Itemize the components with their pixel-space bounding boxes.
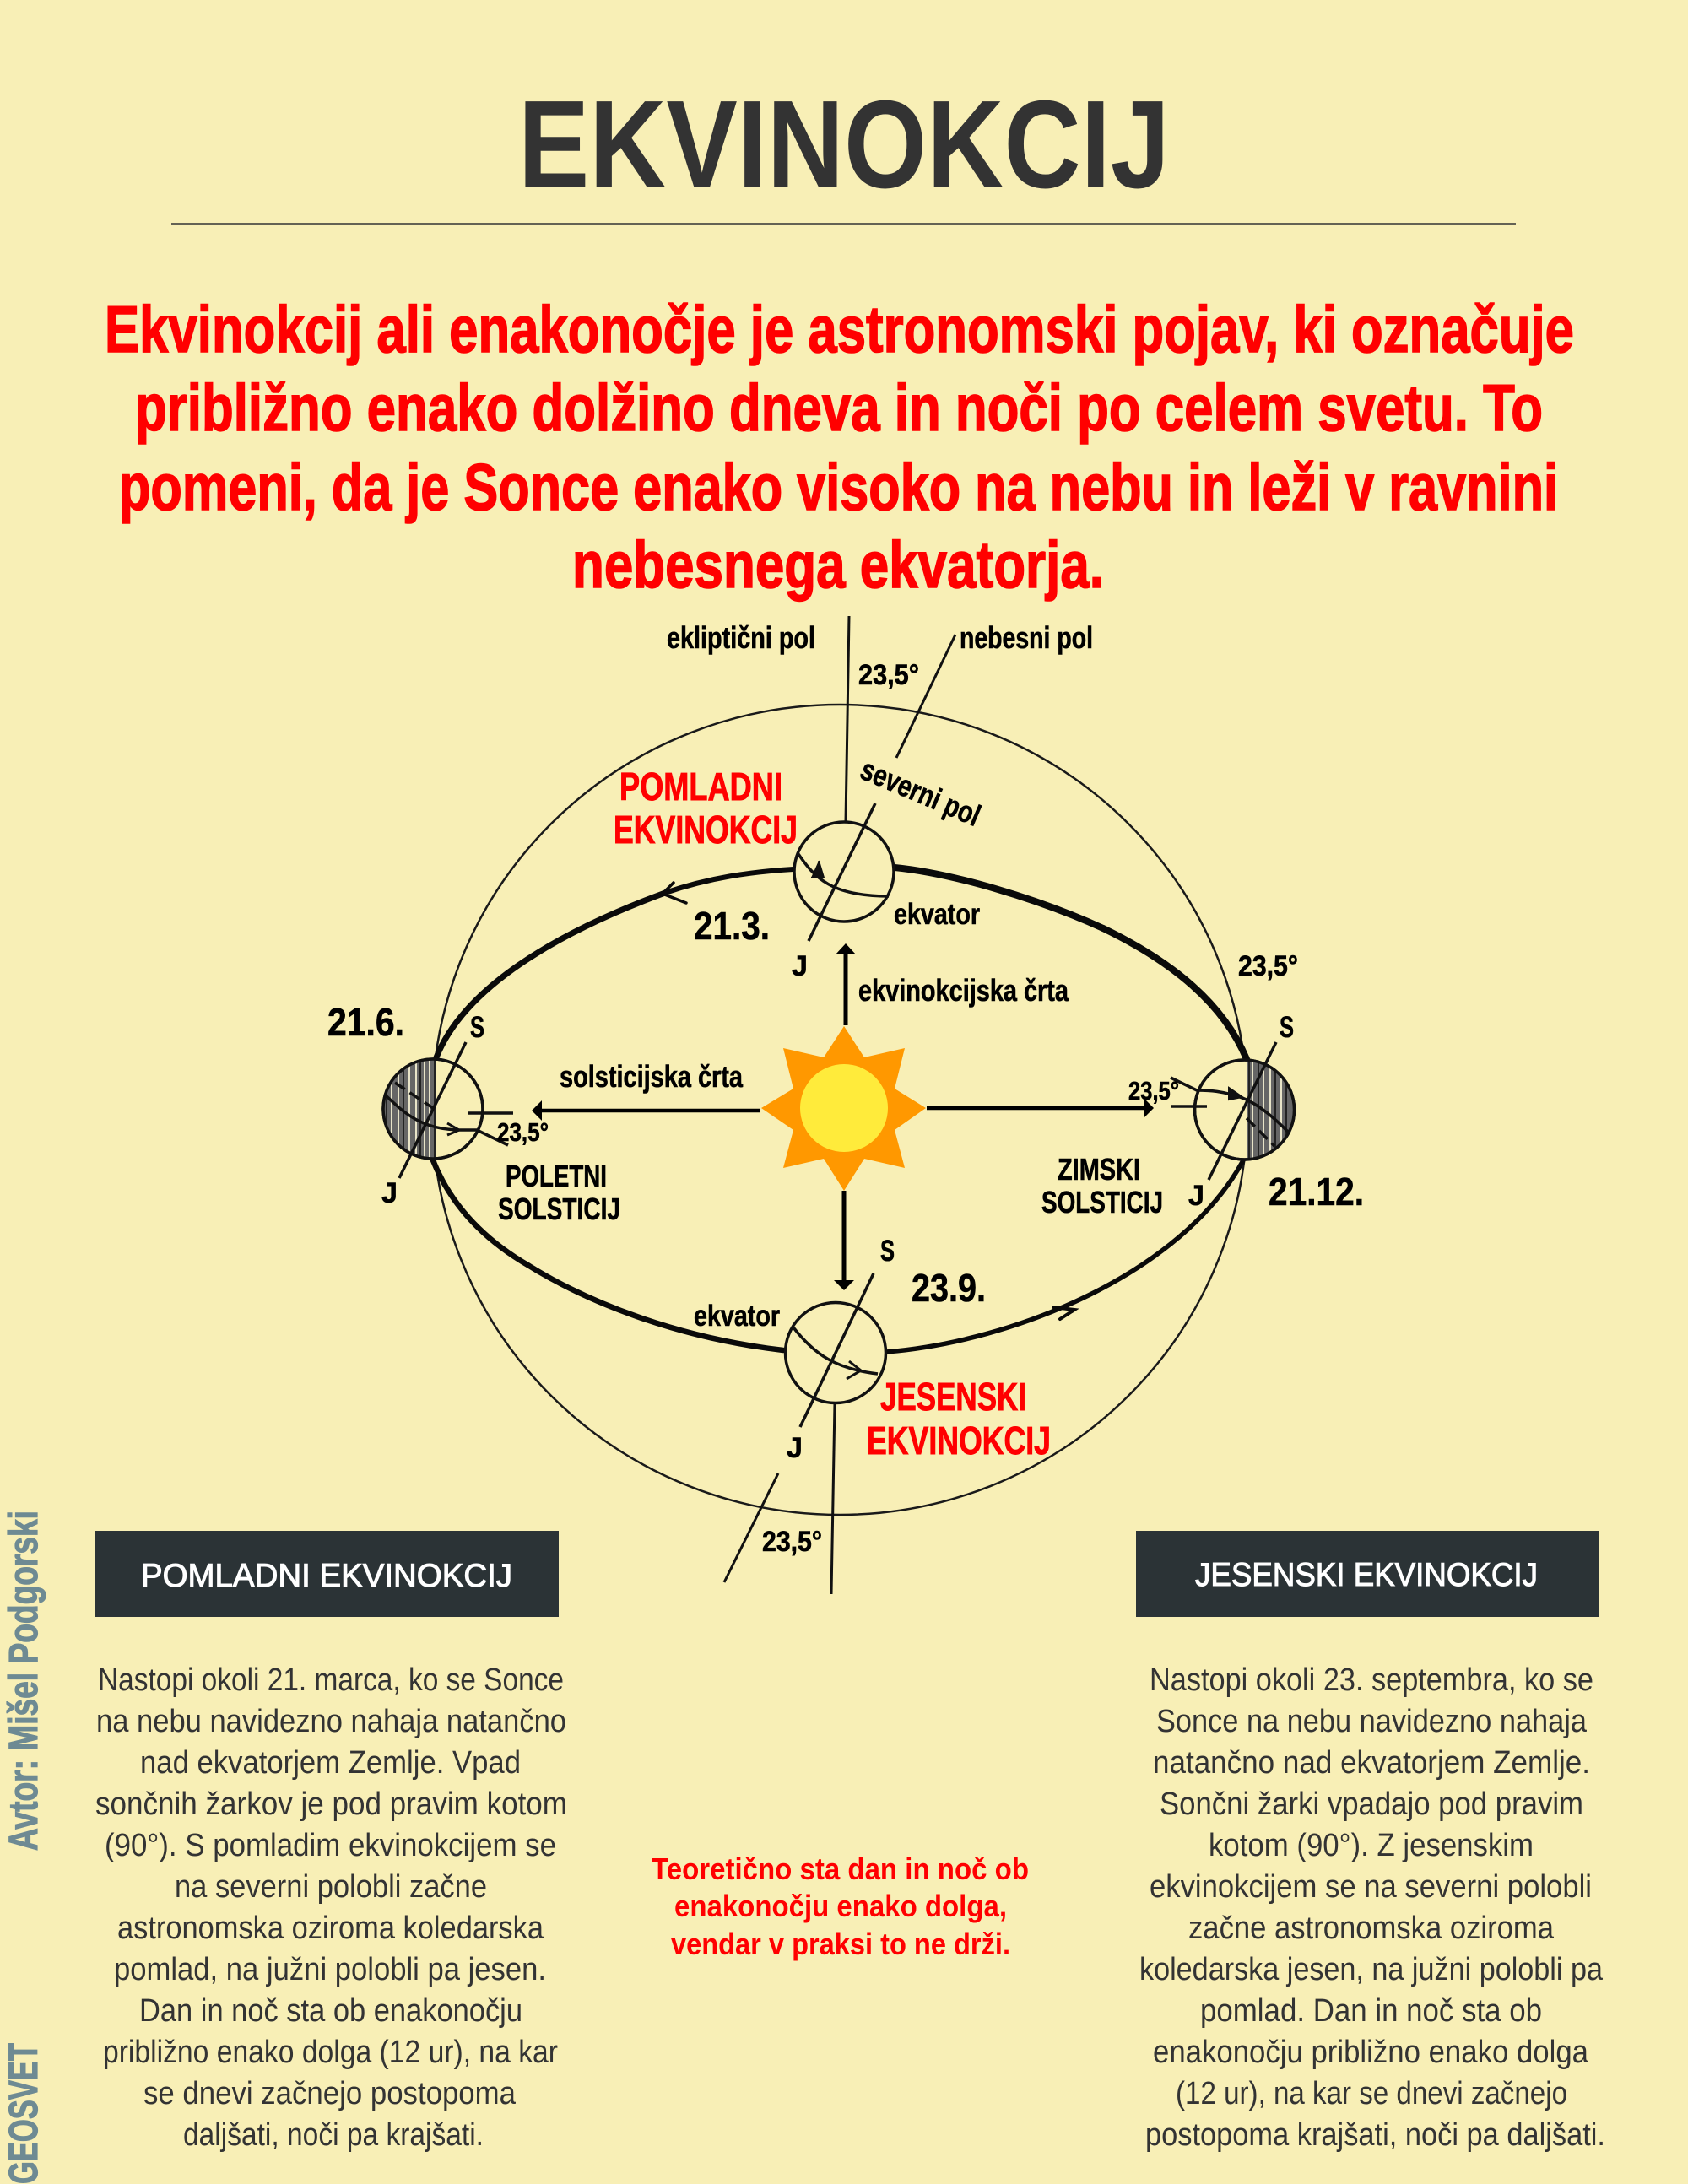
callout: [652, 1852, 1029, 1961]
diagram labels: ekliptični pol: [667, 620, 815, 655]
autumn text: Sonce na nebu navidezno nahaja: [1156, 1704, 1588, 1739]
spring text: približno enako dolga (12 ur), na kar: [103, 2035, 558, 2070]
callout: enakonočju enako dolga,: [674, 1889, 1007, 1923]
diagram labels: S: [470, 1011, 484, 1044]
diagram labels: POLETNI: [506, 1159, 607, 1193]
diagram labels: 21.3.: [694, 904, 770, 948]
autumn heading: [1136, 1531, 1599, 1617]
diagram labels: J: [1188, 1180, 1204, 1212]
diagram labels: J: [792, 950, 808, 982]
red equinox labels: EKVINOKCIJ: [614, 808, 798, 851]
diagram labels: 23,5°: [762, 1526, 822, 1558]
autumn text: koledarska jesen, na južni polobli pa: [1139, 1952, 1604, 1987]
autumn text: začne astronomska oziroma: [1188, 1911, 1555, 1946]
intro text: nebesnega ekvatorja.: [572, 527, 1104, 602]
spring text: na nebu navidezno nahaja natančno: [96, 1704, 566, 1739]
diagram labels: [327, 620, 1364, 1558]
spring text: Dan in noč sta ob enakonočju: [139, 1993, 522, 2029]
diagram labels: S: [1280, 1011, 1294, 1044]
diagram labels: SOLSTICIJ: [1041, 1185, 1163, 1219]
callout: Teoretično sta dan in noč ob: [652, 1852, 1029, 1886]
orbit path: [433, 868, 1247, 1352]
callout: vendar v praksi to ne drži.: [671, 1927, 1010, 1961]
spring text: daljšati, noči pa krajšati.: [183, 2117, 484, 2153]
diagram labels: severni pol: [856, 752, 986, 833]
panel: autumn equinox: [1136, 1531, 1605, 2153]
autumn text: postopoma krajšati, noči pa daljšati.: [1145, 2117, 1605, 2153]
diagram labels: 23,5°: [858, 659, 919, 691]
icon: spring equinox earth: [794, 616, 955, 941]
diagram labels: 21.12.: [1269, 1170, 1364, 1214]
autumn text: Nastopi okoli 23. septembra, ko se: [1150, 1662, 1593, 1698]
autumn text: pomlad. Dan in noč sta ob: [1200, 1993, 1542, 2029]
celestial sphere ring: [432, 705, 1247, 1515]
diagram labels: nebesni pol: [960, 620, 1093, 655]
diagram labels: S: [880, 1235, 895, 1268]
arrow: left: [532, 1100, 760, 1121]
spring text: nad ekvatorjem Zemlje. Vpad: [140, 1745, 521, 1781]
red equinox labels: POMLADNI: [619, 765, 782, 808]
arrow: right: [927, 1098, 1154, 1118]
icon: summer solstice earth: [380, 1042, 513, 1178]
diagram labels: 21.6.: [327, 1000, 404, 1044]
icon: sun: [761, 1026, 926, 1191]
spring heading: [95, 1531, 559, 1617]
spring text: sončnih žarkov je pod pravim kotom: [95, 1787, 567, 1822]
autumn text: enakonočju približno enako dolga: [1153, 2035, 1589, 2070]
arrow: down: [834, 1191, 854, 1290]
diagram labels: 23.9.: [912, 1266, 986, 1310]
red equinox labels: JESENSKI: [880, 1375, 1026, 1419]
spring heading: POMLADNI EKVINOKCIJ: [141, 1558, 512, 1594]
brand credit: GEOSVET: [2, 2043, 46, 2184]
autumn text: natančno nad ekvatorjem Zemlje.: [1153, 1745, 1590, 1781]
title: EKVINOKCIJ: [518, 75, 1170, 214]
icon: autumn equinox earth: [724, 1273, 886, 1594]
spring text: pomlad, na južni polobli pa jesen.: [114, 1952, 546, 1987]
diagram labels: ekvinokcijska črta: [858, 973, 1069, 1008]
diagram labels: ekvator: [894, 898, 980, 931]
diagram labels: ekvator: [694, 1300, 780, 1333]
red equinox labels: EKVINOKCIJ: [867, 1419, 1051, 1462]
autumn heading: JESENSKI EKVINOKCIJ: [1195, 1557, 1538, 1593]
diagram labels: 23,5°: [1128, 1076, 1179, 1106]
arrow: up: [836, 943, 856, 1025]
spring text: [95, 1662, 567, 2153]
diagram labels: 23,5°: [1238, 950, 1298, 982]
diagram labels: J: [787, 1432, 803, 1464]
author credit: Avtor: Mišel Podgorski: [2, 1511, 46, 1851]
diagram labels: solsticijska črta: [560, 1059, 744, 1094]
autumn text: ekvinokcijem se na severni polobli: [1150, 1869, 1592, 1905]
autumn text: Sončni žarki vpadajo pod pravim: [1160, 1787, 1583, 1822]
intro text: [105, 292, 1574, 602]
diagram labels: SOLSTICIJ: [498, 1192, 620, 1226]
spring text: se dnevi začnejo postopoma: [143, 2076, 517, 2111]
spring text: na severni polobli začne: [175, 1869, 487, 1905]
diagram labels: 23,5°: [497, 1117, 549, 1147]
orbit diagram: [327, 616, 1364, 1594]
spring text: astronomska oziroma koledarska: [117, 1911, 544, 1946]
autumn text: kotom (90°). Z jesenskim: [1209, 1828, 1534, 1863]
autumn text: [1139, 1662, 1605, 2153]
red equinox labels: [614, 765, 1051, 1462]
icon: winter solstice earth: [1171, 1042, 1297, 1180]
autumn text: (12 ur), na kar se dnevi začnejo: [1176, 2076, 1567, 2111]
diagram labels: J: [381, 1177, 398, 1209]
panel: spring equinox: [95, 1531, 567, 2153]
spring text: Nastopi okoli 21. marca, ko se Sonce: [98, 1662, 564, 1698]
diagram labels: ZIMSKI: [1058, 1152, 1140, 1187]
spring text: (90°). S pomladim ekvinokcijem se: [105, 1828, 556, 1863]
